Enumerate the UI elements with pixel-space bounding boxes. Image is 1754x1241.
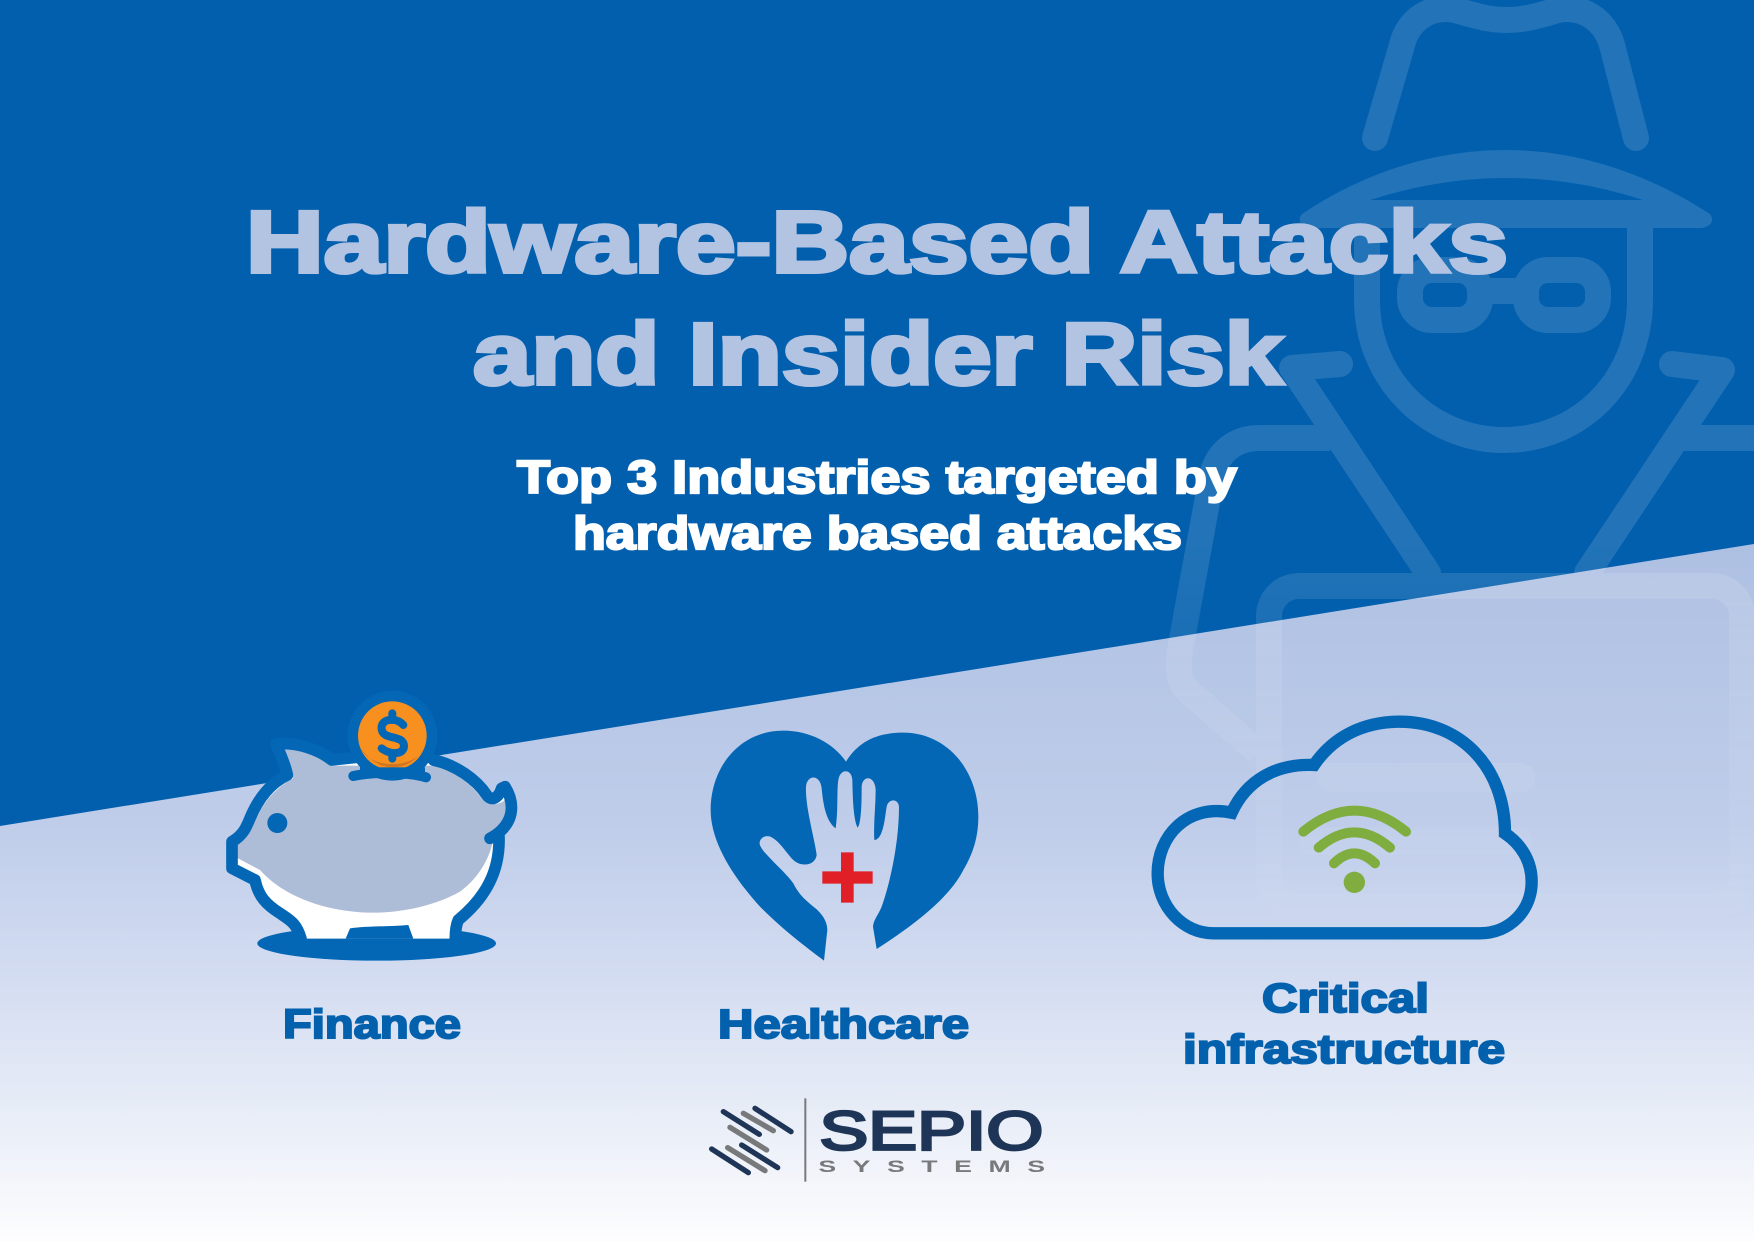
- title: [246, 194, 1508, 403]
- title: and Insider Risk: [473, 306, 1284, 403]
- label: Critical infrastructure: infrastructure: [1183, 1026, 1505, 1072]
- subtitle: hardware based attacks: [573, 507, 1182, 559]
- icon: cloud with wifi: [1158, 722, 1532, 933]
- icon: ghost hacker figure with laptop: [1169, 0, 1754, 638]
- logo: Sepio Systems: SEPIO: [819, 1099, 1043, 1161]
- subtitle: [517, 451, 1237, 559]
- icon: piggy bank with coin: [232, 691, 511, 961]
- icon: heart with hand and red cross: [711, 731, 978, 961]
- label: Healthcare: Healthcare: [718, 1001, 969, 1047]
- title: Hardware-Based Attacks: [246, 194, 1508, 291]
- logo: Sepio Systems: SYSTEMS: [818, 1157, 1045, 1176]
- label: Critical infrastructure: [1183, 975, 1505, 1072]
- background: light diagonal panel: [0, 544, 1754, 1241]
- subtitle: Top 3 Industries targeted by: [517, 451, 1237, 503]
- slot line and coin halo: [347, 691, 437, 781]
- label: Critical infrastructure: Critical: [1262, 975, 1429, 1021]
- logo: Sepio Systems: [712, 1098, 1045, 1182]
- label: Finance: Finance: [283, 1001, 461, 1047]
